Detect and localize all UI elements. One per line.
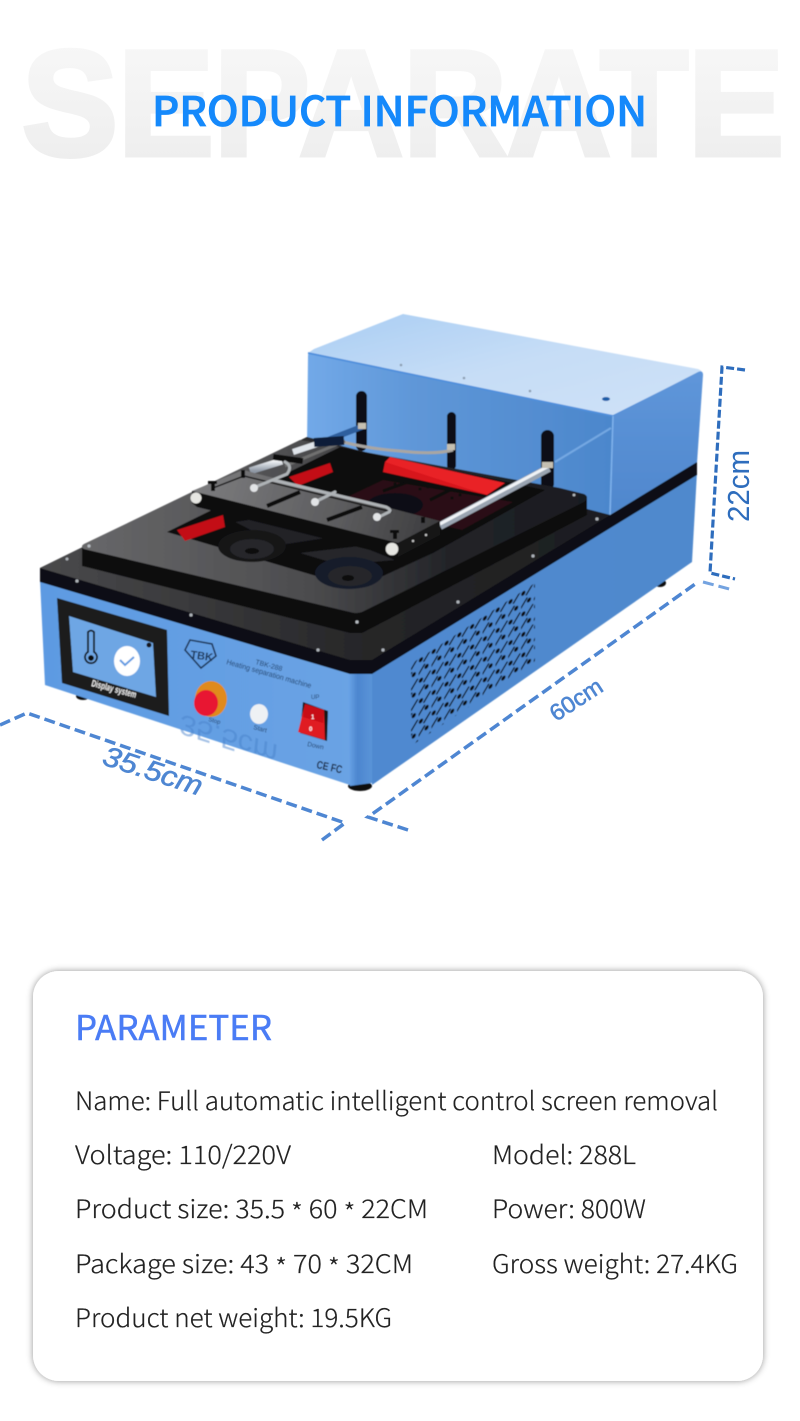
panel: parameter [33, 971, 763, 1381]
carriage clamp wire [253, 462, 390, 518]
rocker switch: Down [307, 741, 325, 751]
carriage groove [213, 476, 392, 512]
carriage slots [267, 492, 362, 520]
pad rear [367, 493, 423, 517]
carriage plate [190, 462, 440, 557]
housing right face [610, 371, 703, 515]
TBK logo [185, 640, 216, 668]
carriage end holes [412, 534, 427, 542]
suction pad right [315, 557, 383, 589]
parameter: product size: * [343, 1193, 355, 1230]
base reflection of dimension text: 35.5cm [174, 708, 282, 770]
vent grille [411, 583, 535, 746]
red bars [177, 515, 225, 541]
parameter: product size: Product size: 35.5 [75, 1189, 275, 1226]
parameter: product size: 22CM [355, 1189, 428, 1226]
suction pad left [218, 530, 286, 562]
label 22cm: 22cm [721, 450, 756, 522]
housing front face [307, 353, 613, 517]
carriage end caps [190, 492, 202, 504]
check badge [114, 646, 140, 676]
parameter: package size: * [328, 1248, 340, 1285]
dimension: 22cm height [710, 367, 756, 579]
heating plate [82, 440, 587, 633]
emergency stop button: Stop [207, 717, 222, 726]
parameter: product size: 60 [303, 1189, 343, 1226]
base side panel [372, 472, 697, 785]
parameter: package size: 70 [287, 1244, 328, 1281]
screen bezel [57, 598, 169, 716]
base black plate [40, 437, 697, 674]
plate corner screws [87, 494, 575, 624]
housing top face [308, 314, 702, 416]
dimension: 35.5cm width [0, 713, 345, 840]
parameter: voltage: Voltage: 110/220V [75, 1135, 291, 1172]
label 60cm: 60cm [545, 673, 607, 726]
upper housing box [307, 314, 703, 517]
panel card [33, 971, 763, 1381]
silver guide rods [250, 423, 553, 526]
rocker switch: UP [311, 695, 319, 701]
label 35.5cm: 35.5cm [99, 740, 207, 802]
start button [250, 704, 268, 735]
thermometer icon [85, 630, 97, 663]
base screws [66, 517, 599, 652]
parameter: net weight: Product net weight: 19.5KG [75, 1298, 392, 1335]
emergency stop button [194, 681, 227, 726]
parameter: model: Model: 288L [492, 1135, 636, 1172]
housing screws [400, 364, 610, 401]
touch screen display [57, 598, 169, 716]
model label: TBK-288 [254, 659, 283, 673]
rod slots [356, 391, 554, 490]
base front panel [40, 580, 350, 785]
plate window [167, 447, 545, 588]
product: heating separation machine [40, 314, 703, 791]
parameter: product size: * [291, 1193, 303, 1230]
parameter: package size: 32CM [340, 1244, 413, 1281]
certification marks: CE FC [315, 759, 343, 776]
screen label: Display system [90, 678, 138, 701]
status dot [146, 642, 152, 648]
TBK logo: TBK [190, 649, 214, 664]
watermark: SEPARATE: SEPARATE [22, 19, 784, 187]
parameter: name: Name: Full automatic intelligent control screen removal [75, 1081, 718, 1118]
rocker switch: 1 [311, 715, 315, 721]
base corner [348, 670, 372, 786]
interior reflections [235, 512, 345, 545]
parameter: gross weight: Gross weight: 27.4KG [492, 1244, 738, 1281]
rocker switch [298, 695, 328, 751]
parameter: package size: Package size: 43 [75, 1244, 258, 1281]
perforated inner plate [345, 480, 513, 530]
machine name label: Heating separation machine [225, 657, 313, 690]
panel heading: PARAMETER [75, 1001, 272, 1050]
parameter: power: Power: 800W [492, 1189, 646, 1226]
carriage knobs [208, 470, 425, 539]
dimension: 60cm depth [368, 582, 733, 830]
rocker switch: 0 [309, 727, 313, 733]
start button: Start [252, 724, 268, 735]
title: PRODUCT INFORMATION [152, 78, 647, 138]
parameter: package size: * [275, 1248, 287, 1285]
screen surface [69, 616, 156, 697]
machine feet [76, 579, 666, 791]
